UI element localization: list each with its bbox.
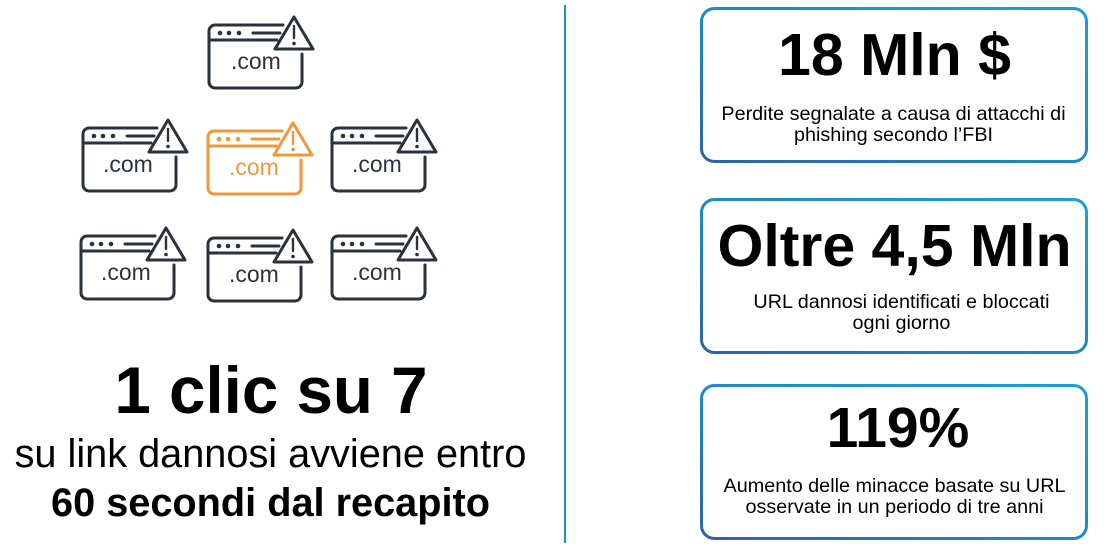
stat: Oltre 4,5 Mln: Oltre 4,5 Mln — [717, 213, 1072, 279]
icon: domain warning highlighted orange — [208, 123, 312, 194]
icon: domain warning row 2 left — [83, 120, 187, 191]
icon: domain warning row 3 left — [81, 228, 185, 299]
icon: domain warning row 3 middle: .com — [229, 261, 279, 287]
description: losses: phishing secondo l’FBI — [794, 124, 993, 146]
icon: domain warning row 3 right — [332, 228, 436, 299]
description: losses: Perdite segnalate a causa di attacchi di — [721, 103, 1066, 125]
panel: FBI losses — [702, 8, 1086, 162]
icon: domain warning row 2 right — [332, 120, 436, 191]
vertical divider — [564, 5, 566, 543]
stat: 18 Mln $: 18 Mln $ — [778, 22, 1011, 88]
panel: blocked URLs — [702, 200, 1086, 352]
icon group: malicious domains — [81, 17, 436, 301]
subheading line: su link dannosi avviene entro — [15, 432, 526, 476]
icon: domain warning row 3 middle — [208, 230, 312, 301]
icon: domain warning top — [209, 17, 313, 88]
subheading bold line: 60 secondi dal recapito — [51, 481, 490, 525]
icon: domain warning highlighted orange: .com — [229, 154, 279, 180]
stat: 119%: 119% — [827, 396, 969, 460]
icon: domain warning row 2 left: .com — [103, 151, 153, 177]
description: URLs: URL dannosi identificati e bloccati — [753, 291, 1050, 313]
icon: domain warning row 2 right: .com — [352, 151, 402, 177]
icon: domain warning row 3 left: .com — [101, 259, 151, 285]
icon: domain warning top: .com — [231, 48, 281, 74]
description: growth: Aumento delle minacce basate su URL — [724, 475, 1065, 497]
description: growth: osservate in un periodo di tre anni — [745, 496, 1044, 518]
headline statistic: 1 clic su 7 — [114, 354, 428, 427]
panel: URL threats growth — [702, 386, 1086, 538]
icon: domain warning row 3 right: .com — [352, 259, 402, 285]
description: URLs: ogni giorno — [853, 312, 950, 334]
